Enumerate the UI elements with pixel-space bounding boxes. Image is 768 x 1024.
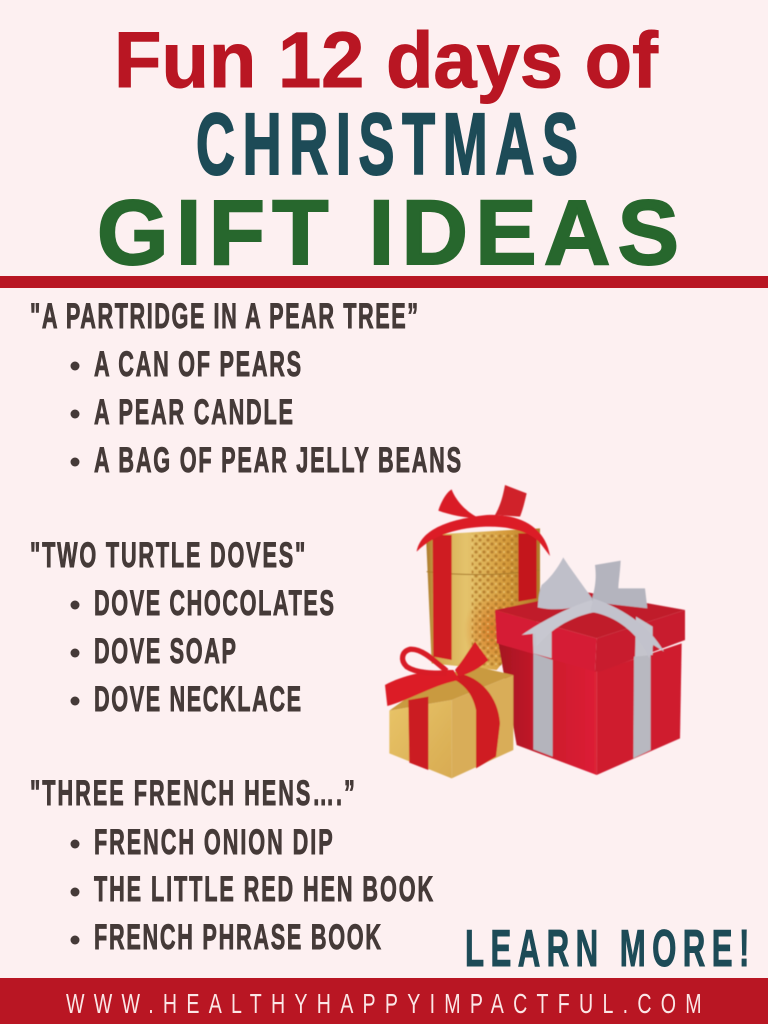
heading: turtle doves: "TWO TURTLE DOVES" [30, 537, 305, 575]
title line 2: CHRISTMAS [196, 96, 578, 193]
gift: tall gold cylinder [417, 485, 550, 670]
red bow: tall box [438, 489, 480, 518]
gift list: partridge [30, 298, 461, 480]
red bow: small box [385, 670, 460, 706]
bullet item: can of pears: A CAN OF PEARS [94, 346, 301, 384]
gift list: french hens [30, 775, 433, 957]
header divider bar [0, 276, 768, 288]
bullet item: jelly beans: A BAG OF PEAR JELLY BEANS [94, 442, 461, 480]
illustration: stacked gift boxes [385, 485, 685, 778]
bullet item: onion dip: FRENCH ONION DIP [94, 824, 333, 862]
silver ribbons [533, 653, 553, 757]
call to action: LEARN MORE! [465, 920, 749, 978]
footer bar [0, 978, 768, 1024]
bullet item: dove chocolates: DOVE CHOCOLATES [94, 585, 334, 623]
gift: large red box [495, 557, 685, 775]
heading: partridge: "A PARTRIDGE IN A PEAR TREE” [30, 298, 418, 336]
bullet item: pear candle: A PEAR CANDLE [94, 394, 293, 432]
title [97, 15, 679, 284]
silver bow [538, 557, 593, 609]
gift: small gold box [385, 642, 513, 778]
title line 3: GIFT IDEAS [97, 182, 679, 284]
heading: french hens: "THREE FRENCH HENS….” [30, 775, 355, 813]
bullet item: phrase book: FRENCH PHRASE BOOK [94, 919, 381, 957]
title line 1: Fun 12 days of [114, 15, 659, 104]
bullet item: dove necklace: DOVE NECKLACE [94, 681, 301, 719]
gift list: turtle doves [30, 537, 334, 719]
bullet item: dove soap: DOVE SOAP [94, 633, 236, 671]
bullet item: little red hen: THE LITTLE RED HEN BOOK [94, 871, 433, 909]
footer website: WWW.HEALTHYHAPPYIMPACTFUL.COM [66, 989, 702, 1020]
